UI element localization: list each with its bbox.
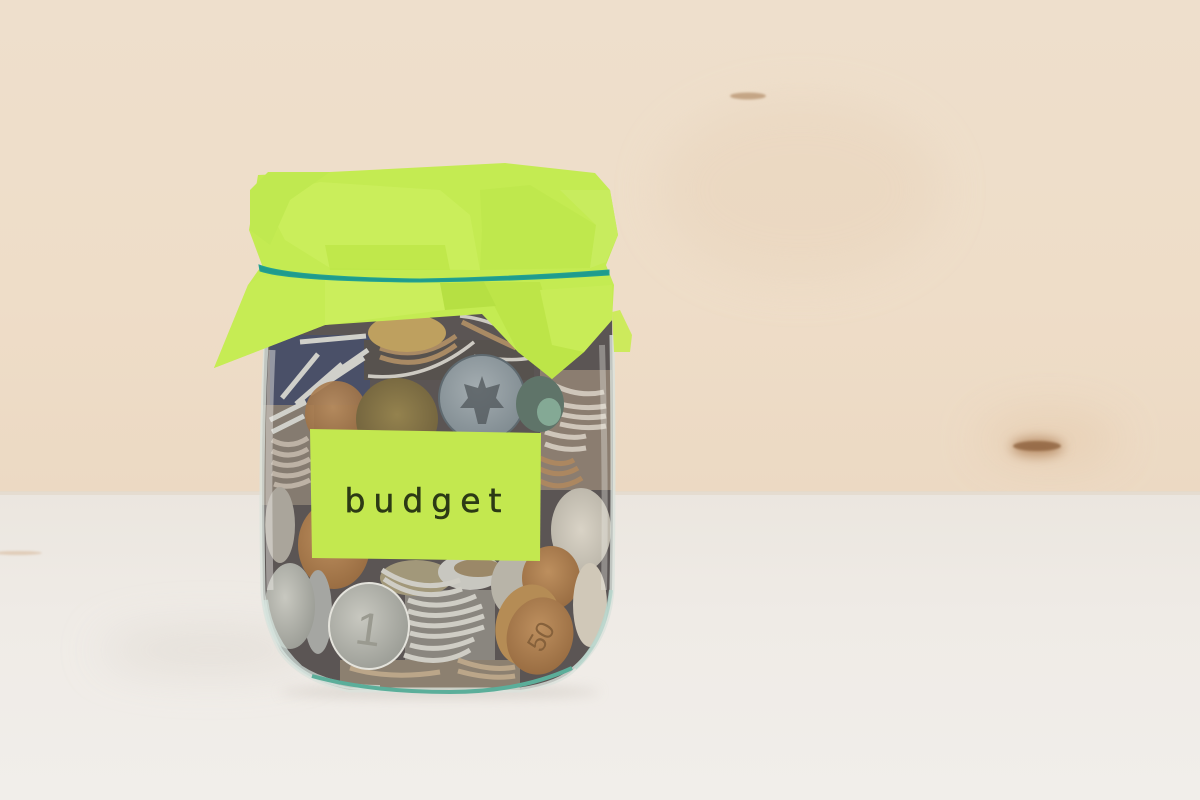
coin with number 1: 1 [352,601,385,656]
jar glass edges [262,335,613,690]
stacked coins right [545,384,606,449]
green reflective coin [516,376,564,432]
table surface [0,491,1200,800]
label with budget text: budget [344,481,510,520]
stacked coins upper left [270,336,368,432]
coin with number 1 [329,583,409,669]
coins inside jar: 50 [521,616,561,657]
coins inside jar [260,310,620,695]
gold coin top [368,314,446,352]
stacked coins left [272,438,310,486]
copper coin upper [305,381,362,432]
copper coins lower right [495,584,556,664]
lower coins [265,487,295,563]
wooden wall background [0,0,1200,494]
glass jar [260,310,620,695]
teal rubber band [259,265,609,282]
silver eagle coin [439,355,525,441]
brass coin upper [356,378,438,432]
green paper lid [214,163,632,379]
label with budget text [310,429,541,561]
